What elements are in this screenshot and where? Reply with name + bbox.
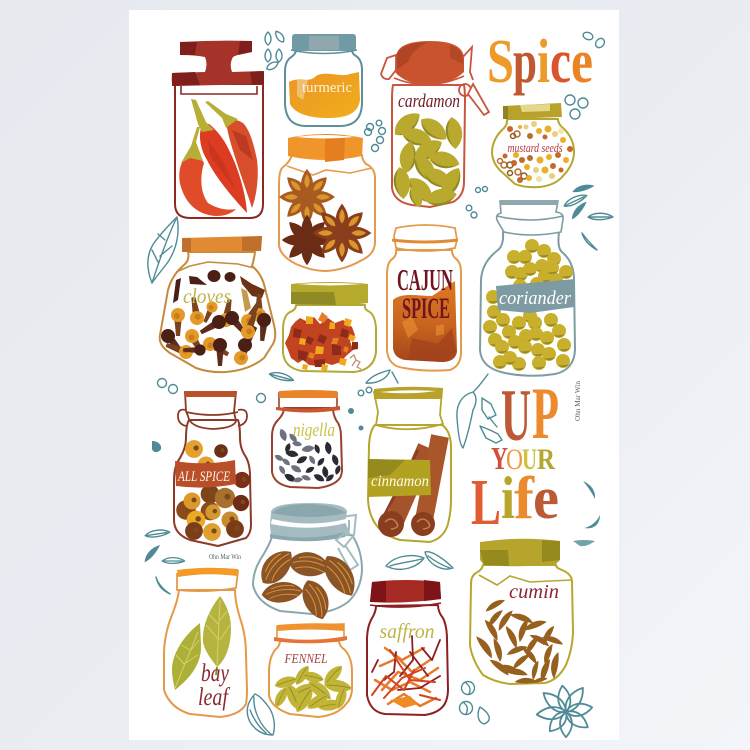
jar: mustard seeds (492, 103, 574, 187)
jar: saffron (367, 580, 448, 715)
title: Up Your Life: L (471, 466, 501, 539)
title: Spice: c (550, 28, 571, 96)
fennel pods (271, 662, 353, 715)
jar: chili peppers (172, 41, 264, 218)
teal leaves left (142, 528, 185, 594)
mustard seeds (498, 121, 573, 183)
label: turmeric: turmeric (302, 80, 352, 96)
chili left (179, 152, 236, 216)
saffron threads (372, 636, 440, 708)
label: bay leaf (198, 660, 230, 711)
label: cajun spice (397, 262, 453, 325)
label band: coriander (496, 279, 575, 313)
star anise left (279, 169, 335, 225)
jar: cloves (158, 236, 275, 372)
title: Up Your Life: R (537, 443, 555, 476)
cinnamon sticks (378, 436, 440, 537)
jar: cinnamon (368, 387, 451, 542)
artist credit vertical: Ohn Mar Win (574, 380, 582, 421)
teal seeds top left (265, 30, 286, 72)
star anise right (313, 204, 371, 262)
label: cardamon: cardamon (398, 91, 460, 112)
title: Spice: i (537, 28, 550, 96)
chili stems (181, 99, 238, 163)
jar: coriander: coriander (499, 288, 572, 309)
label: fennel: FENNEL (284, 652, 328, 667)
jar: cumin (470, 539, 573, 686)
jar: turmeric (285, 34, 362, 126)
label band: cinnamon (368, 459, 431, 497)
nigella seeds (274, 428, 342, 484)
title: Up Your Life: O (506, 443, 523, 476)
title: Spice: S (487, 28, 514, 96)
jar: fennel (269, 623, 353, 717)
jar: coriander (480, 200, 575, 376)
label: cumin: cumin (509, 581, 559, 603)
title: Up Your Life: Y (491, 440, 508, 476)
jar: cinnamon: cinnamon (371, 473, 429, 490)
jar: all spice (174, 391, 251, 546)
jar: bay leaf (164, 568, 247, 717)
jar: chili flakes (283, 282, 376, 372)
jar: cajun spice (387, 225, 461, 371)
all spice berries (176, 440, 250, 541)
label: saffron: saffron (380, 619, 434, 643)
teal pods middle (386, 552, 453, 569)
star anise dark (282, 215, 332, 265)
teal large pod outline (247, 694, 274, 735)
coriander seeds bottom (483, 290, 571, 371)
clasp (381, 47, 489, 115)
bay leaves (172, 596, 231, 690)
title: Up Your Life: U (522, 443, 537, 476)
title: Up Your Life: U (501, 375, 531, 457)
teal dots mid (466, 186, 488, 218)
teal seeds bottom (460, 682, 489, 724)
jar: clip-top pods (253, 503, 362, 623)
teal star anise outline (536, 684, 593, 737)
label: cajun spice: SPICE (402, 292, 450, 325)
label band: all spice (175, 460, 236, 488)
chili middle (200, 124, 247, 213)
title: Up Your Life: f (514, 465, 535, 531)
teal pepper outline (457, 374, 502, 448)
title: Up Your Life: P (532, 373, 559, 455)
teal leaves near coriander (563, 182, 613, 250)
teal outlined leaf (148, 217, 178, 283)
label: cloves: cloves (183, 284, 231, 308)
jar: all spice: ALL SPICE (177, 469, 230, 485)
label: nigella: nigella (293, 420, 335, 441)
jar: nigella (272, 390, 342, 488)
jar: cardamon (381, 41, 489, 209)
label: bay leaf: leaf (198, 684, 230, 711)
label: cajun spice: CAJUN (397, 262, 453, 297)
brown pods (253, 544, 362, 623)
teal seeds top right (565, 31, 606, 119)
flakes (285, 312, 361, 371)
cloves (158, 270, 272, 367)
cardamon pods (389, 108, 466, 209)
poster sheet (129, 10, 619, 740)
cajun spice powder (393, 281, 457, 362)
jar: star anise (279, 134, 375, 271)
teal sketches centre (152, 370, 398, 452)
title: Spice: p (513, 28, 537, 96)
teal peppercorns centre (364, 120, 386, 152)
coriander seeds top (505, 239, 573, 293)
label: mustard seeds: mustard seeds (508, 141, 563, 155)
title: Spice (487, 28, 593, 96)
teal crescents right (573, 481, 600, 546)
title: Up Your Life (471, 373, 559, 539)
clasp (336, 515, 358, 570)
label: bay leaf: bay (201, 660, 230, 687)
artist credit horizontal: Ohn Mar Win (209, 553, 241, 561)
title: Spice: e (571, 28, 593, 96)
title: Up Your Life: e (533, 465, 559, 531)
chili right (226, 120, 258, 208)
title: Up Your Life: i (501, 465, 515, 531)
cumin seeds (476, 598, 564, 686)
